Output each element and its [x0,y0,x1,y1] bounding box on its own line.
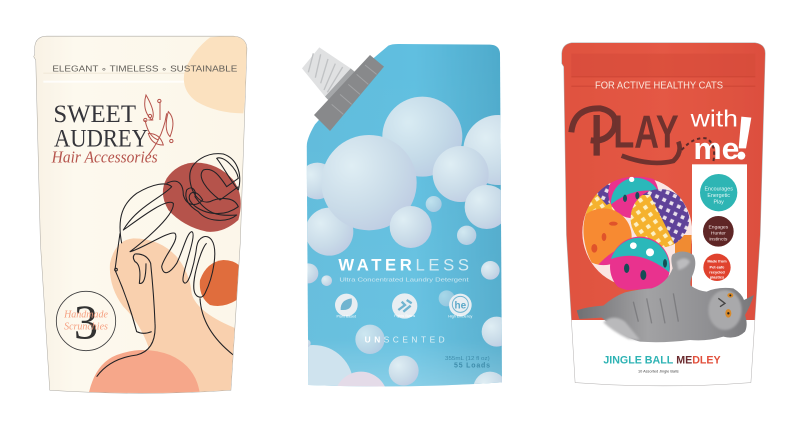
tagline: FOR ACTIVE HEALTHY CATS [595,80,723,91]
spout cap [302,47,384,131]
pouch: Waterless laundry detergent [302,44,502,386]
badge: recycled plastics: recycled [709,270,725,274]
scent label: UNSCENTED [365,335,445,345]
shape: light peach body blob [110,238,240,393]
tagline: ELEGANT ∘ TIMELESS ∘ SUSTAINABLE [52,64,238,74]
ball: front teal and pink [610,236,670,290]
title: Play: LAY [613,106,679,158]
photo: jingle balls [582,176,692,290]
title: with: with [690,106,738,132]
icon: high efficiency [448,294,473,319]
badge: 3 handmade scrunchies: Scrunchies [64,321,108,332]
bubbles [306,44,502,386]
badge: 3 handmade scrunchies: Handmade [63,309,108,320]
photo: grey cat lying on its back [577,251,754,342]
badge: hunter instincts: instincts [709,237,728,243]
badge: energetic play: Encourages [704,187,733,193]
brand name: SWEET [53,100,137,128]
badge: energetic play: Play [713,199,724,205]
pouch: Sweet Audrey hair accessories [30,33,253,397]
icon: high efficiency: he [455,300,467,311]
subtitle script: Hair Accessories [51,148,158,167]
icon: high efficiency: High Efficiency [448,315,473,319]
title: me!: me [693,132,739,166]
quantity note: 10 Assorted Jingle Balls [638,370,679,374]
title: Play [571,106,680,163]
icon: plant based: Plant Based [336,315,356,319]
badge: hunter instincts: Hunter [711,230,726,236]
pouch: Play with me cat toy [560,42,767,387]
badge: hunter instincts: Engages [708,224,729,230]
shape: top right peach blob [184,36,246,114]
shape: coral semicircle [88,350,200,395]
badge: recycled plastics: Made from [707,259,727,263]
icon: botanical sprig [144,95,173,155]
shape: orange blob [200,260,243,306]
ball: purple and yellow lattice [630,189,690,248]
product name: JINGLE BALL MEDLEY [603,355,721,367]
brand name: WATERLESS [338,256,469,275]
title: me! [682,117,751,166]
badge: hunter instincts [703,216,734,247]
shape: dark red blob [163,163,241,232]
icon: plant based [335,294,358,319]
ball: orange back right [675,235,692,254]
white benefits panel [692,164,747,309]
badge: energetic play: Energetic [707,193,730,199]
load count: 55 Loads [454,363,490,370]
badge: recycled plastics: Pet-safe [710,265,724,269]
badge: 3 handmade scrunchies [56,291,116,351]
icon: fights stains: Fights Stains [394,314,415,318]
subtitle: Ultra Concentrated Laundry Detergent [339,277,469,283]
line art: woman portrait [97,154,240,377]
brand name: AUDREY [54,125,148,153]
volume: 355mL (12 fl oz) [445,356,490,362]
badge: recycled plastics [703,254,731,281]
badge: energetic play [700,174,737,211]
brand name [53,100,148,153]
ball: orange and pink [583,208,632,266]
ball: top teal and pink [608,176,658,218]
back lattice ball [585,184,617,216]
badge: recycled plastics: plastics [710,276,724,280]
icon: fights stains [392,293,417,319]
badge: 3 handmade scrunchies: 3 [74,296,98,349]
